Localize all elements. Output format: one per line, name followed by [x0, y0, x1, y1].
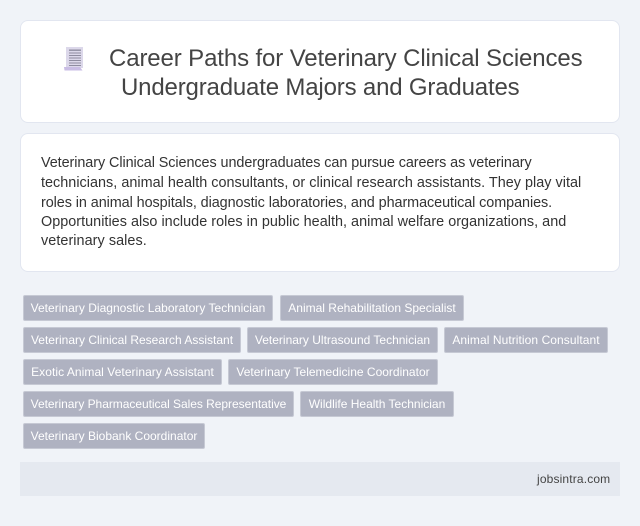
description text: Veterinary Clinical Sciences undergraduates can pursue careers as veterinary: [41, 155, 532, 171]
panel: title card: [20, 20, 620, 123]
title line 2: Undergraduate Majors and Graduates: [121, 74, 519, 101]
tag: Veterinary Telemedicine Coordinator: [236, 365, 430, 379]
tag: Veterinary Pharmaceutical Sales Representative: [31, 397, 286, 411]
tag: Exotic Animal Veterinary Assistant: [31, 365, 214, 379]
tag: [23, 391, 294, 417]
description text: veterinary sales.: [41, 233, 147, 249]
tag: [228, 359, 438, 385]
tag: Veterinary Diagnostic Laboratory Technician: [31, 301, 265, 315]
title: Career Paths for Veterinary Clinical Sciences: [109, 45, 582, 72]
tag: [280, 295, 464, 321]
tag: [247, 327, 438, 353]
tag: [23, 423, 205, 449]
tag: Wildlife Health Technician: [309, 397, 445, 411]
panel: description card: [20, 133, 620, 272]
icon: document scroll: [64, 47, 83, 70]
tag: [300, 391, 454, 417]
tag: Veterinary Ultrasound Technician: [255, 333, 430, 347]
tag: [23, 295, 273, 321]
footer bar: [20, 462, 620, 496]
tag: [23, 359, 222, 385]
tag: Veterinary Clinical Research Assistant: [31, 333, 233, 347]
tag: Animal Rehabilitation Specialist: [288, 301, 456, 315]
description text: [41, 155, 581, 249]
description text: roles in animal hospitals, diagnostic laboratories, and pharmaceutical companies.: [41, 195, 552, 211]
tag: [444, 327, 608, 353]
footer source: jobsintra.com: [537, 472, 610, 486]
tag: Animal Nutrition Consultant: [452, 333, 600, 347]
tag: [23, 327, 241, 353]
tag: Veterinary Biobank Coordinator: [31, 429, 197, 443]
description text: Opportunities also include roles in public health, animal welfare organizations, and: [41, 214, 566, 230]
description text: technicians, animal health consultants, or clinical research assistants. They play vital: [41, 175, 581, 191]
